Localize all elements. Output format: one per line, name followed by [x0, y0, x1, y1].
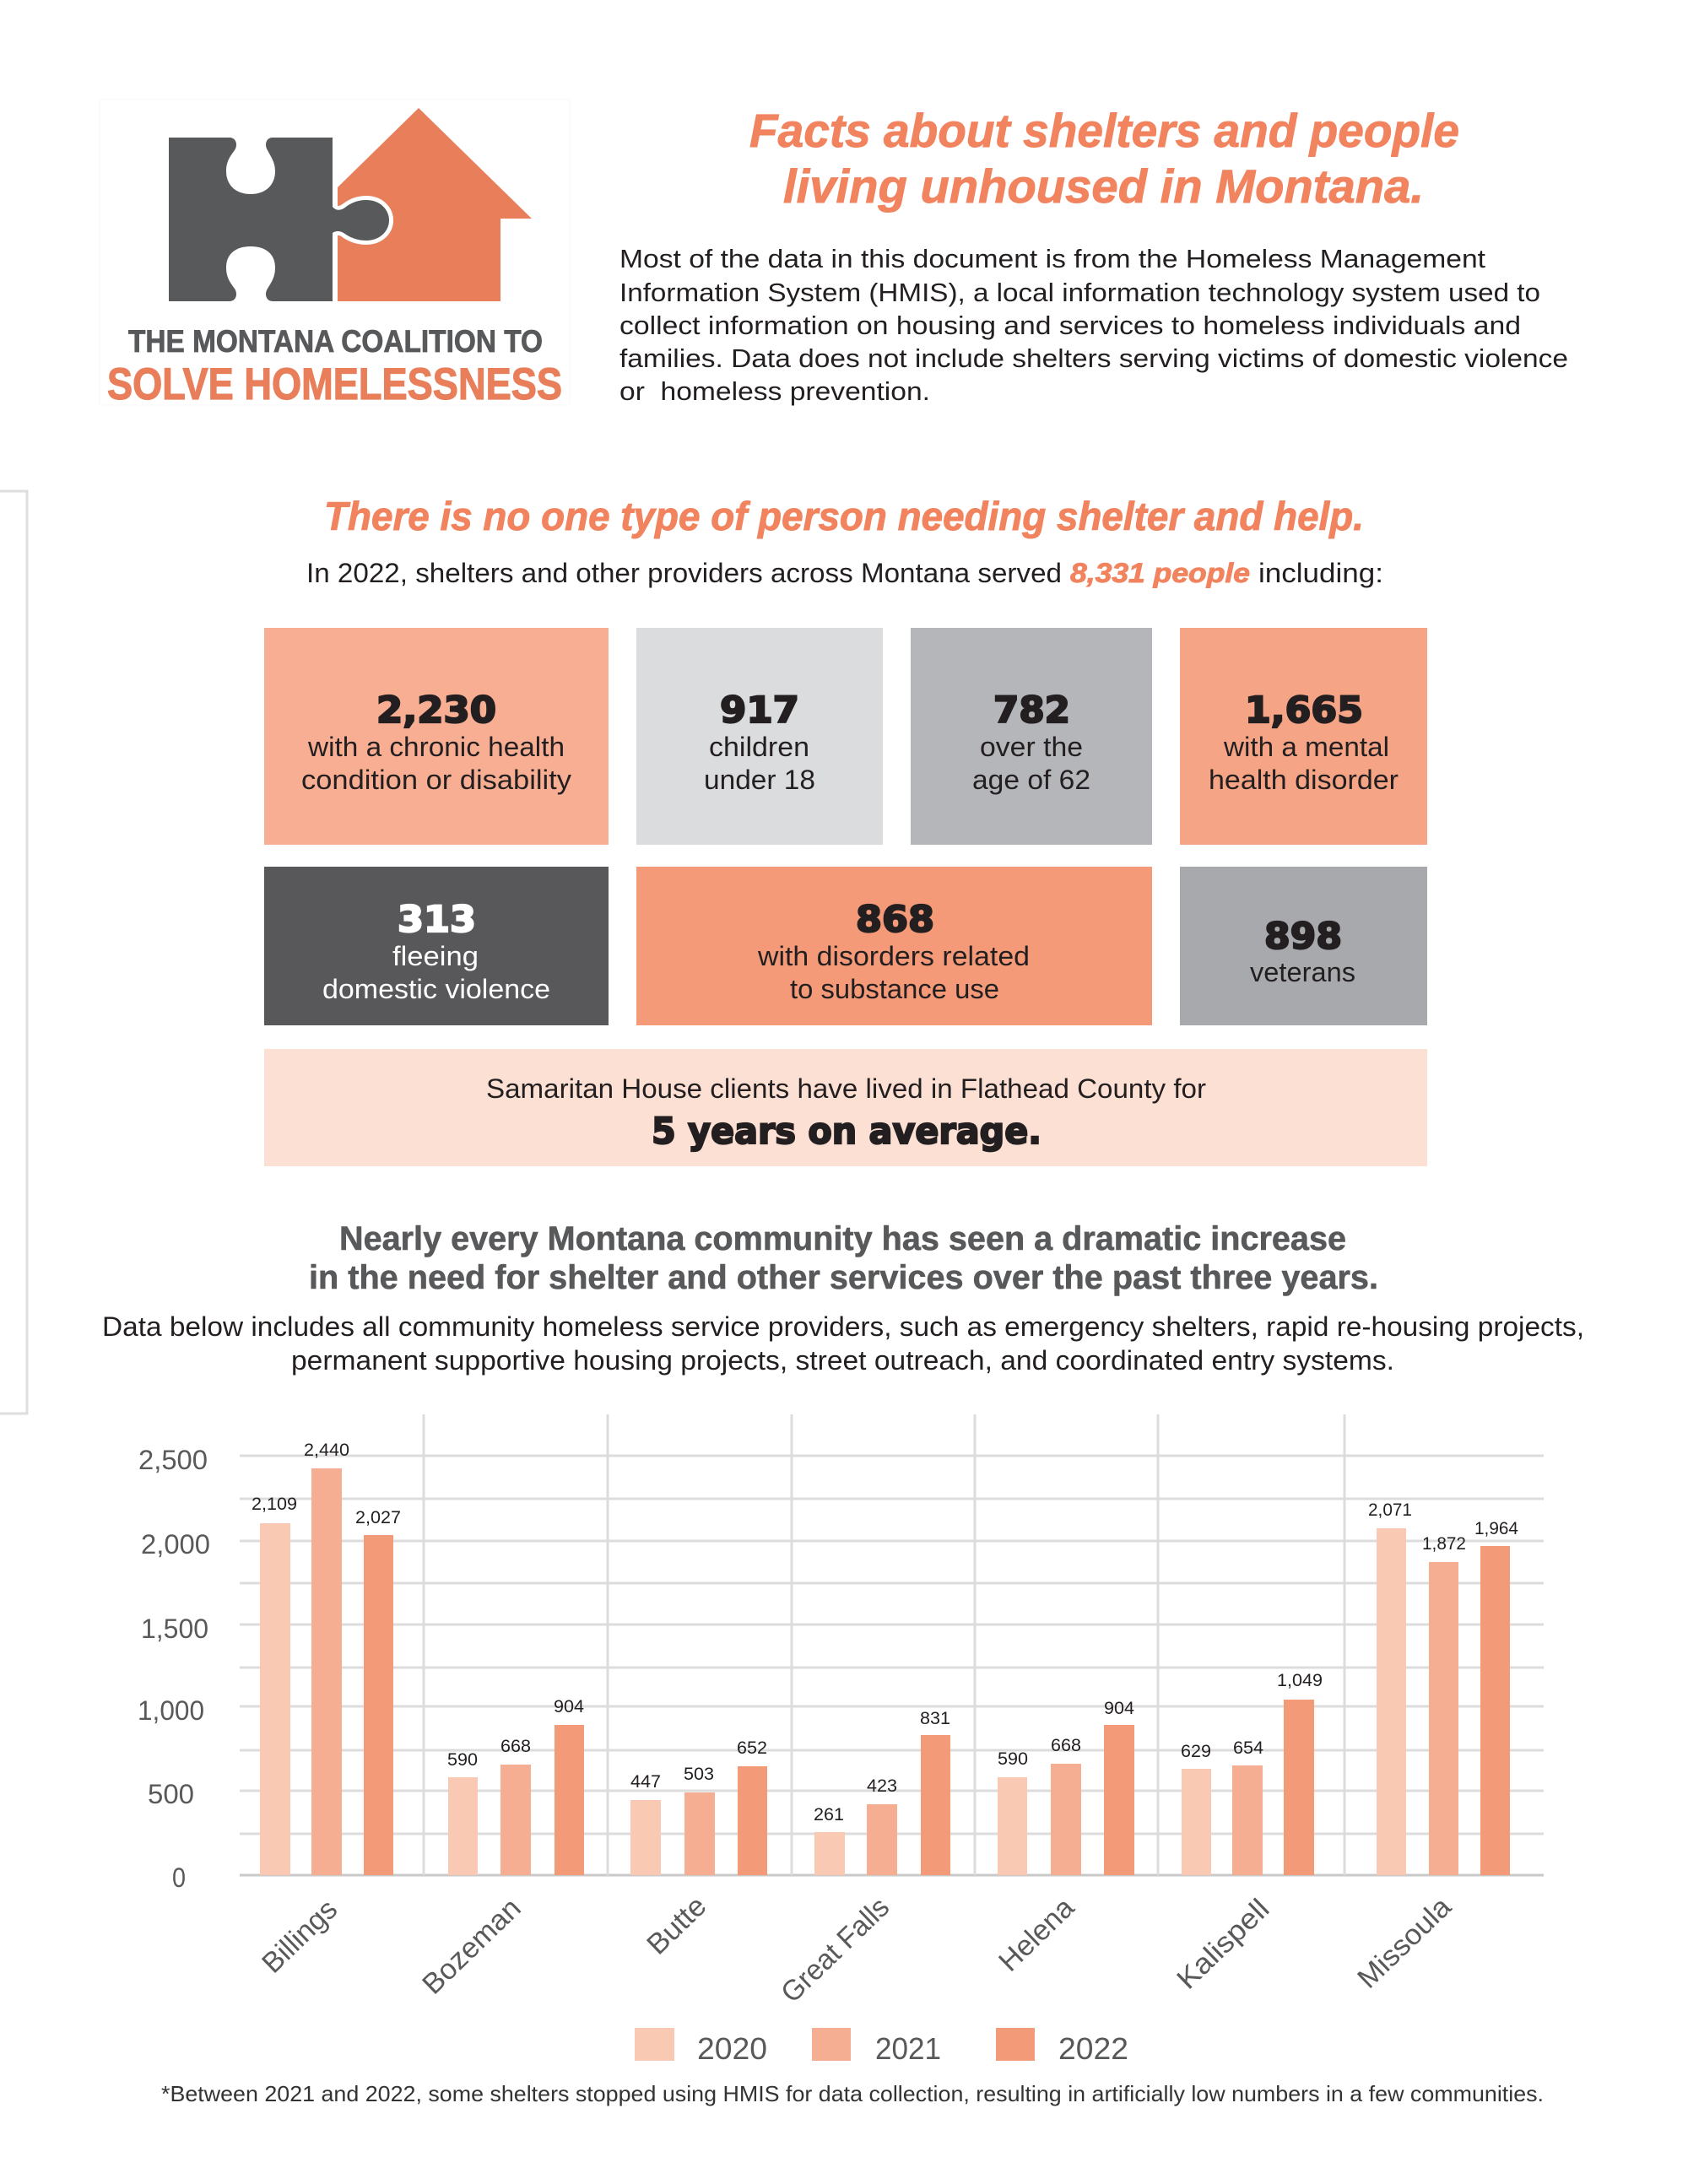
stat box: over 62: 782: [993, 689, 1070, 732]
stat box: mental health: [1180, 628, 1427, 845]
side panel outline: [0, 491, 27, 1414]
bars: Butte: [630, 1738, 767, 1875]
x axis labels: Bozeman: [416, 1892, 528, 2001]
callout: Samaritan House: [264, 1049, 1427, 1166]
legend: 2021: [875, 2031, 941, 2066]
intro text block: [619, 244, 1568, 406]
x axis labels: Butte: [641, 1889, 713, 1961]
bars: Helena: [998, 1699, 1134, 1875]
bars: Bozeman: 668: [500, 1737, 531, 1756]
bars: Missoula: 1,872: [1422, 1534, 1466, 1554]
chart description text: Data below includes all community homeless service providers, such as emergency shelters, rapid re-housing projects,: [102, 1311, 1584, 1342]
bars: Billings: [252, 1441, 401, 1875]
section heading: dramatic increase: in the need for shelter and other services over the past three years.: [309, 1259, 1378, 1296]
stat box: domestic violence: domestic violence: [322, 974, 550, 1004]
stat box: chronic health: [264, 628, 609, 845]
bars: Bozeman: [447, 1697, 584, 1875]
bars: Kalispell: 654: [1233, 1738, 1263, 1758]
legend: [635, 2028, 1128, 2066]
title: living unhoused in Montana.: [783, 159, 1424, 213]
section intro sentence: In 2022, shelters and other providers across Montana served: [306, 558, 1062, 588]
stat box: substance use: 868: [856, 899, 934, 941]
legend: 2020: [697, 2031, 767, 2066]
intro text block: collect information on housing and services to homeless individuals and: [619, 311, 1521, 340]
x axis labels: Great Falls: [775, 1891, 895, 2009]
logo text line one: THE MONTANA COALITION TO: [128, 324, 543, 359]
stat box: mental health: health disorder: [1209, 765, 1399, 795]
bars: Butte: 503: [684, 1765, 714, 1784]
bars: Helena: 590: [998, 1749, 1028, 1769]
legend: 2022: [1058, 2031, 1128, 2066]
bars: Kalispell: 1,049: [1277, 1671, 1323, 1690]
bars: Great Falls: 423: [867, 1776, 897, 1796]
bars: Billings: 2,440: [304, 1441, 349, 1460]
y axis labels: 1,000: [138, 1695, 204, 1726]
stat box: children: [636, 628, 883, 845]
section heading: dramatic increase: [309, 1220, 1378, 1296]
chart description text: [102, 1311, 1584, 1376]
section heading: no one type of person: There is no one type of person needing shelter and help.: [324, 494, 1364, 538]
stat box: over 62: over the: [980, 732, 1083, 762]
title: [749, 104, 1459, 213]
stat box: chronic health: 2,230: [376, 689, 496, 732]
stat box: children: 917: [720, 689, 799, 732]
footnote: *Between 2021 and 2022, some shelters stopped using HMIS for data collection, resulting in artificially low numbers in a few communities.: [161, 2081, 1544, 2106]
stat box: veterans: veterans: [1250, 957, 1355, 987]
logo: Montana Coalition to Solve Homelessness: [100, 100, 570, 409]
y axis labels: 500: [148, 1779, 194, 1809]
bars: Butte: 447: [630, 1772, 661, 1792]
y axis labels: 2,000: [141, 1529, 210, 1560]
callout: Samaritan House: Samaritan House clients have lived in Flathead County for: [486, 1073, 1206, 1104]
bars: Great Falls: [814, 1709, 950, 1875]
stat box: veterans: [1180, 867, 1427, 1025]
icon: puzzle piece: [169, 138, 389, 301]
bars: Missoula: 1,964: [1474, 1519, 1518, 1538]
section intro sentence: [306, 558, 1383, 588]
logo text line two: SOLVE HOMELESSNESS: [107, 359, 562, 409]
y axis labels: 1,500: [141, 1614, 208, 1644]
bars: Great Falls: 261: [814, 1805, 844, 1825]
stat box: mental health: with a mental: [1223, 732, 1389, 762]
stat box: children: under 18: [704, 765, 815, 795]
bars: Missoula: 2,071: [1368, 1500, 1412, 1520]
bars: Helena: 904: [1104, 1699, 1134, 1718]
intro text block: Information System (HMIS), a local information technology system used to: [619, 278, 1540, 307]
section intro sentence: 8,331 people: [1070, 558, 1250, 588]
stat box: chronic health: with a chronic health: [307, 732, 565, 762]
y axis labels: [138, 1445, 210, 1893]
chart description text: permanent supportive housing projects, street outreach, and coordinated entry systems.: [291, 1345, 1394, 1376]
x axis labels: Missoula: [1351, 1891, 1458, 1995]
bars: Great Falls: 831: [920, 1709, 950, 1728]
bars: Missoula: [1368, 1500, 1518, 1875]
stat box: veterans: 898: [1264, 916, 1342, 958]
x axis labels: Billings: [256, 1893, 344, 1980]
bars: Bozeman: 904: [554, 1697, 584, 1716]
intro text block: families. Data does not include shelters serving victims of domestic violence: [619, 343, 1568, 373]
y axis labels: 2,500: [138, 1445, 208, 1475]
intro text block: Most of the data in this document is from the Homeless Management: [619, 244, 1485, 273]
x axis labels: Kalispell: [1171, 1893, 1275, 1996]
bars: Kalispell: 629: [1181, 1742, 1211, 1761]
stat box: substance use: [636, 867, 1152, 1025]
section heading: dramatic increase: Nearly every Montana community has seen a dramatic increase: [339, 1220, 1346, 1257]
bars: Billings: 2,027: [355, 1508, 401, 1527]
stat box: over 62: [911, 628, 1152, 845]
bars: Butte: 652: [737, 1738, 767, 1758]
stat box: over 62: age of 62: [972, 765, 1090, 795]
x axis labels: [256, 1889, 1458, 2009]
callout: Samaritan House: 5 years on average.: [652, 1111, 1041, 1153]
icon: house: [338, 108, 532, 301]
bar chart: [138, 1414, 1544, 2009]
bars: Kalispell: [1181, 1671, 1323, 1875]
stat box: children: children: [709, 732, 809, 762]
stat box: domestic violence: fleeing: [392, 941, 479, 971]
bars: Billings: 2,109: [252, 1495, 297, 1514]
x axis labels: Helena: [993, 1891, 1080, 1978]
stat box: domestic violence: [264, 867, 609, 1025]
stat box: domestic violence: 313: [398, 899, 476, 941]
section intro sentence: including:: [1258, 558, 1383, 588]
title: Facts about shelters and people: [749, 104, 1459, 157]
bars: Bozeman: 590: [447, 1750, 478, 1770]
bars: Helena: 668: [1051, 1736, 1081, 1755]
stat box: chronic health: condition or disability: [301, 765, 571, 795]
stat box: substance use: to substance use: [790, 974, 999, 1004]
stat box: substance use: with disorders related: [757, 941, 1030, 971]
stat box: mental health: 1,665: [1245, 689, 1363, 732]
y axis labels: 0: [172, 1862, 186, 1893]
intro text block: or homeless prevention.: [619, 376, 930, 406]
